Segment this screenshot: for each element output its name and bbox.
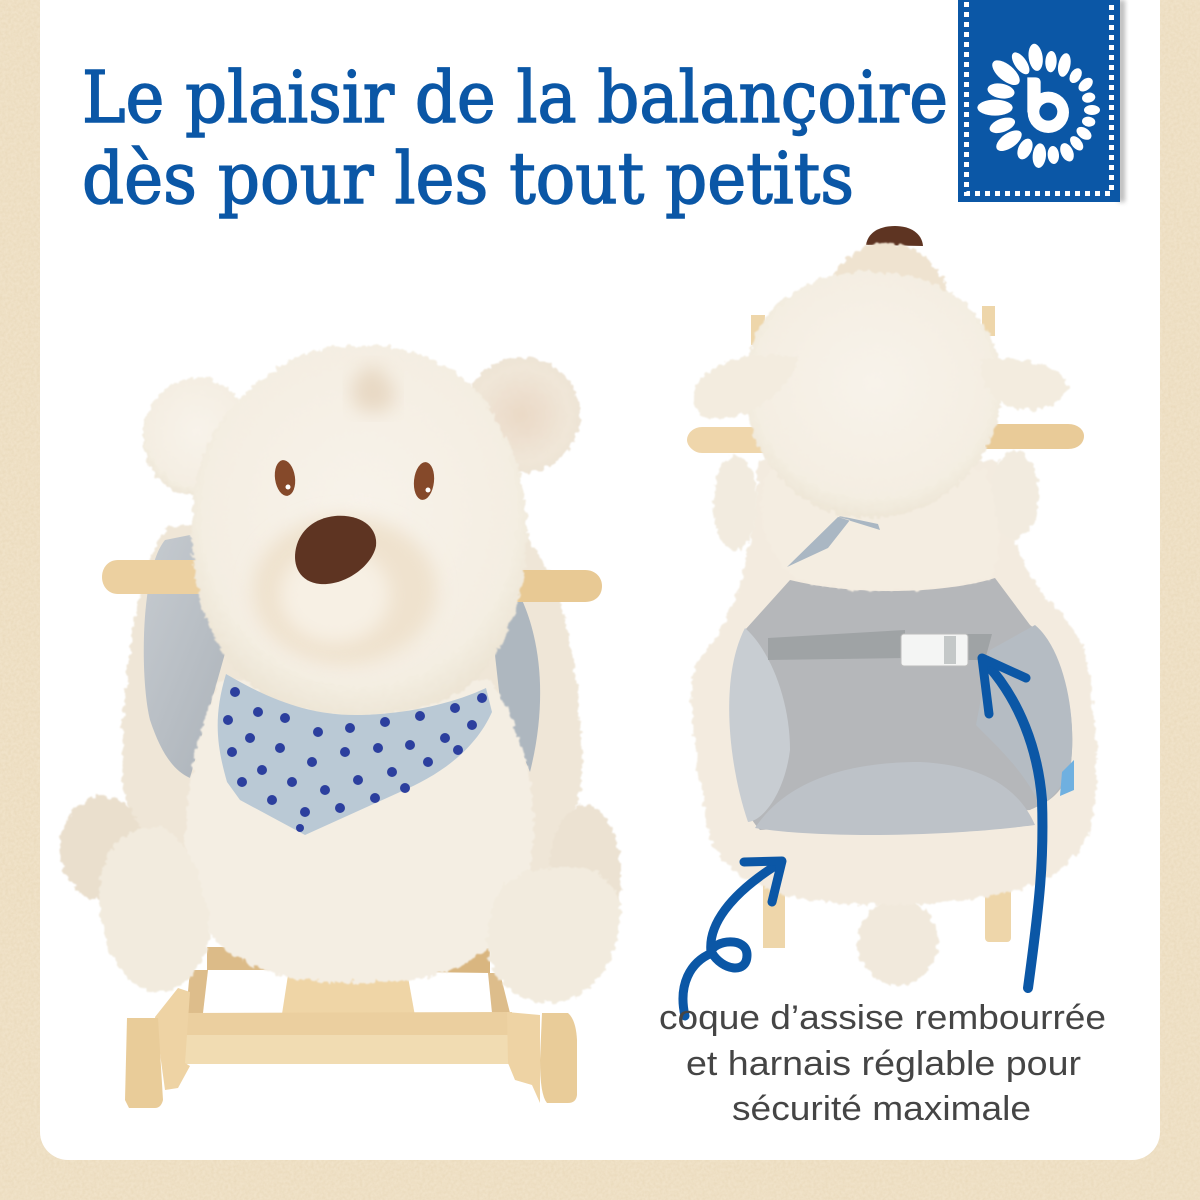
wooden rocker base	[125, 947, 577, 1108]
grey seat interior	[729, 578, 1072, 835]
bear ears	[143, 357, 580, 496]
back view: plush bear rocker	[687, 226, 1097, 985]
neck bandana	[787, 516, 880, 567]
bear eyes	[273, 459, 436, 501]
bandana	[218, 674, 492, 835]
seat shell	[692, 460, 1097, 905]
caption: et harnais réglable pour	[686, 1045, 1081, 1083]
caption: sécurité maximale	[732, 1090, 1031, 1128]
grey seat padding	[144, 535, 540, 778]
title: Le plaisir de la balançoire	[82, 56, 948, 139]
arrow: seat shell callout	[683, 861, 782, 1016]
tail	[858, 899, 938, 985]
caption	[659, 999, 1106, 1128]
small label tab	[1060, 760, 1074, 796]
wooden handles	[687, 424, 1084, 453]
back body	[762, 470, 999, 590]
harness belt with buckle	[768, 630, 992, 666]
snout seen from behind	[825, 226, 950, 300]
wooden handles	[102, 560, 602, 602]
wooden legs	[751, 306, 1011, 948]
bear nose	[295, 516, 376, 584]
bear back paws	[60, 796, 621, 945]
ears from behind	[694, 355, 1070, 418]
seat shell behind bear	[122, 525, 582, 880]
front view: plush bear rocker	[60, 345, 621, 1108]
brand logo tag	[958, 0, 1125, 202]
title	[82, 56, 948, 220]
side paws	[713, 451, 1039, 550]
bear head	[192, 345, 527, 716]
head from behind	[745, 272, 1002, 518]
bear front paws	[99, 826, 620, 1002]
caption: coque d’assise rembourrée	[659, 999, 1106, 1037]
arrow: harness callout	[982, 658, 1042, 988]
title: dès pour les tout petits	[82, 137, 854, 220]
bear muzzle	[253, 365, 437, 664]
bear body	[186, 680, 534, 982]
icon: sunflower b	[977, 43, 1100, 169]
